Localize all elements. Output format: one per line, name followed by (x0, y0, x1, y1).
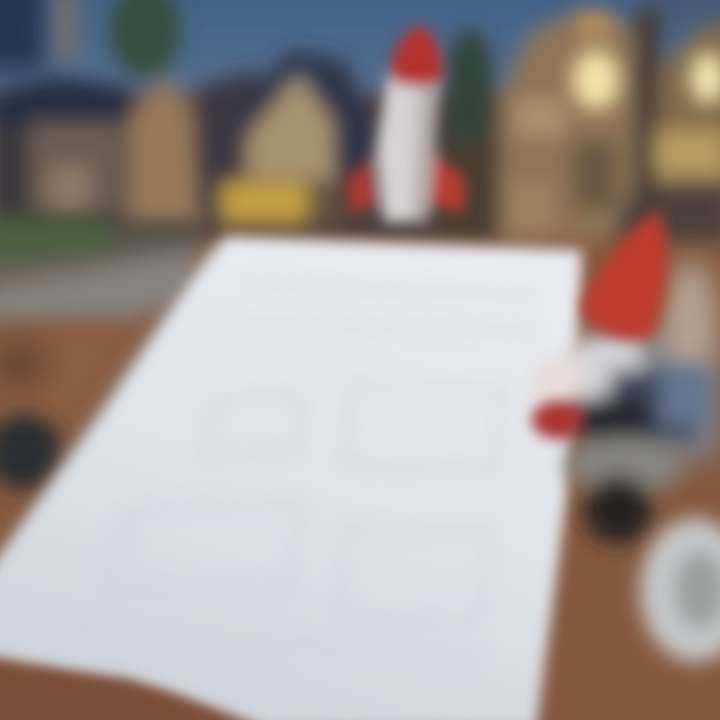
centre house wall (245, 76, 335, 180)
gnome body shadow (590, 260, 720, 460)
grass and road at left (0, 218, 200, 322)
gnome figure (530, 210, 720, 662)
centre house roof (235, 50, 375, 200)
rocket (345, 26, 466, 222)
town backdrop (0, 0, 720, 240)
sky (0, 0, 720, 110)
window glow (572, 13, 720, 110)
wood tones at left (0, 330, 130, 500)
faint blueprint markings (60, 285, 540, 660)
paper shadow (0, 238, 230, 600)
gnome red hat (580, 210, 667, 340)
dark object at left (0, 414, 62, 490)
second house (128, 76, 198, 225)
left house roof (0, 76, 130, 135)
tree left (109, 0, 181, 78)
rocket nose (390, 26, 443, 86)
white object lower right (640, 518, 720, 662)
right houses (500, 8, 636, 240)
left house wall (30, 122, 120, 212)
gnome beard and body (530, 330, 710, 544)
dark gap (200, 70, 260, 200)
bottom-left wood edge (0, 662, 262, 720)
gnome red hand (532, 401, 584, 439)
rocket fins (345, 155, 378, 215)
rocket body (376, 72, 440, 222)
yellow house base (222, 182, 308, 222)
blueprint paper (0, 236, 582, 720)
tree behind rocket (446, 28, 494, 152)
